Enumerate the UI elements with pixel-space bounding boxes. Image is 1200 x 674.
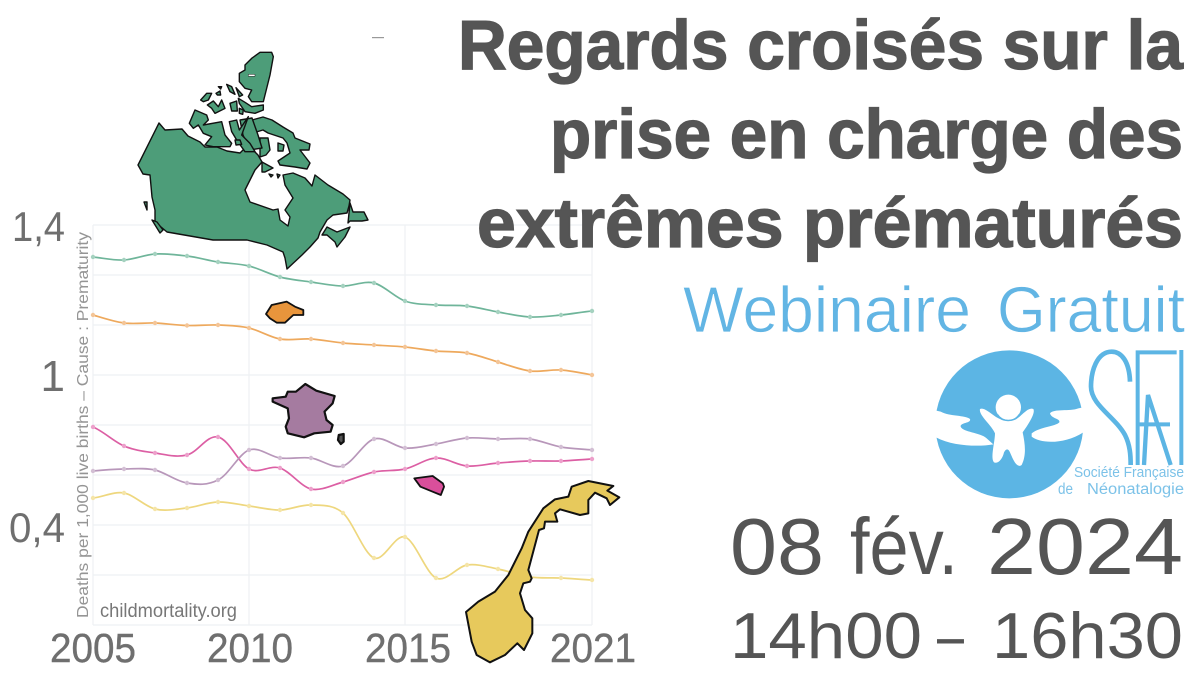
line chart: deaths per 1,000 live births — [93, 225, 592, 625]
date: 2024 — [987, 502, 1183, 591]
x axis labels: 2010 — [207, 625, 293, 671]
x axis labels: 2005 — [50, 625, 136, 671]
subtitle: Webinaire Gratuit: Webinaire — [683, 273, 971, 346]
date: fév. — [850, 502, 958, 591]
time: – — [937, 599, 965, 672]
x axis labels: 2015 — [365, 625, 451, 671]
icon: circle with hands and baby — [932, 350, 1087, 498]
map: Switzerland — [266, 302, 303, 323]
date: 08 — [730, 502, 824, 591]
title: extrêmes prématurés — [477, 184, 1183, 262]
map: Luxembourg — [414, 476, 444, 495]
mainland — [138, 123, 350, 269]
peninsulas and eastern islands — [260, 138, 270, 157]
subtitle: Webinaire Gratuit — [683, 273, 1185, 346]
logo: SFAN — [932, 350, 1184, 498]
map: Canada — [138, 52, 368, 269]
series: Canada (green) — [93, 254, 592, 317]
y axis label: 1: 1 — [41, 352, 65, 401]
Baffin — [252, 117, 310, 169]
time: 14h00 — [730, 599, 922, 672]
date — [730, 502, 1183, 591]
series: Luxembourg (pink) — [93, 427, 592, 489]
source: childmortality.org: childmortality.org — [100, 601, 237, 622]
x axis labels — [50, 625, 636, 671]
map: France — [273, 384, 344, 444]
x axis labels: 2021 — [550, 625, 636, 671]
logo text: Néonatalogie — [1087, 481, 1184, 498]
series: Norway (yellow) — [93, 493, 592, 580]
title: Regards croisés sur la — [458, 6, 1184, 84]
logo text — [1058, 465, 1184, 498]
icon: SFAN lettering — [1091, 350, 1181, 465]
series: Switzerland (orange) — [93, 315, 592, 375]
map: Norway — [466, 481, 619, 662]
title: prise en charge des — [550, 95, 1183, 173]
series: France (mauve) — [93, 438, 592, 484]
time: 16h30 — [992, 599, 1183, 672]
logo text: de — [1058, 481, 1073, 498]
y axis label: 1,4: 1,4 — [12, 203, 65, 250]
y axis title: Deaths per 1,000 live births – Cause : Prematurity — [75, 232, 92, 618]
time — [730, 599, 1183, 672]
subtitle: Webinaire Gratuit: Gratuit — [997, 273, 1185, 346]
arctic archipelago — [189, 52, 273, 152]
logo text: Société Française — [1074, 465, 1184, 481]
title — [458, 6, 1184, 262]
y axis label: 0,4: 0,4 — [9, 504, 65, 551]
